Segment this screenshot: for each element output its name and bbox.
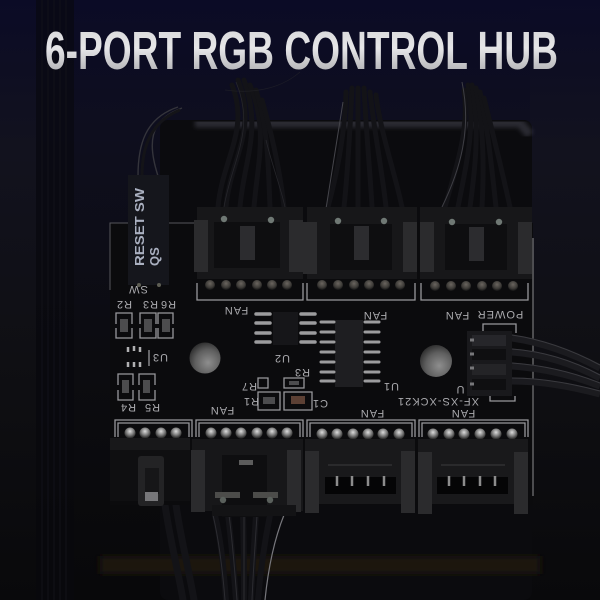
circuit board: [110, 223, 533, 505]
silkscreen labels: C1: [312, 397, 328, 409]
reset switch connector: RESET SW: [132, 187, 147, 266]
silkscreen labels: FAN: [445, 309, 469, 321]
bottom pins: [124, 428, 518, 440]
silkscreen labels: SW: [128, 283, 148, 295]
silkscreen labels: [116, 283, 523, 419]
bottom cables: [165, 505, 284, 600]
reset switch wires: [138, 107, 182, 176]
top fan cables: [218, 72, 510, 215]
bottom connector 1: [191, 439, 303, 517]
bottom connector 2: [305, 439, 415, 513]
silkscreen labels: FAN: [360, 407, 384, 419]
top connector 1: [194, 207, 303, 279]
top pins: [205, 280, 518, 291]
silkscreen labels: U: [456, 383, 464, 395]
left case cables: [0, 0, 74, 600]
chip U1: [321, 320, 379, 387]
silkscreen labels: U1: [383, 380, 399, 392]
silkscreen labels: R7: [241, 380, 257, 392]
reset switch connector: [128, 175, 169, 287]
silkscreen labels: R4: [120, 401, 136, 413]
silkscreen labels: FAN: [210, 404, 234, 416]
top connector 2: [303, 207, 417, 279]
power connector and cables: [467, 324, 600, 401]
resistor footprints: [116, 313, 312, 410]
silkscreen labels: U3: [152, 351, 168, 363]
silkscreen labels: XF-XS-XCK21: [397, 395, 479, 407]
bottom connector 3: [418, 439, 528, 514]
mounting holes: [190, 342, 452, 377]
silkscreen labels: FAN: [451, 407, 475, 419]
silkscreen labels: R3: [294, 366, 310, 378]
bottom 4-pin connector: [110, 438, 190, 506]
top connector 3: [420, 207, 532, 279]
silkscreen labels: U2: [274, 352, 290, 364]
silkscreen labels: FAN: [224, 304, 248, 316]
silkscreen labels: R1: [243, 395, 259, 407]
reset switch connector: QS: [147, 247, 162, 266]
silkscreen labels: R3: [142, 298, 158, 310]
silkscreen labels: POWER: [477, 308, 523, 320]
silkscreen labels: R6: [160, 298, 176, 310]
silkscreen labels: R2: [116, 298, 132, 310]
silkscreen labels: R5: [144, 401, 160, 413]
connector outlines: [115, 283, 528, 437]
silkscreen labels: FAN: [363, 309, 387, 321]
chip U2: [256, 312, 315, 345]
